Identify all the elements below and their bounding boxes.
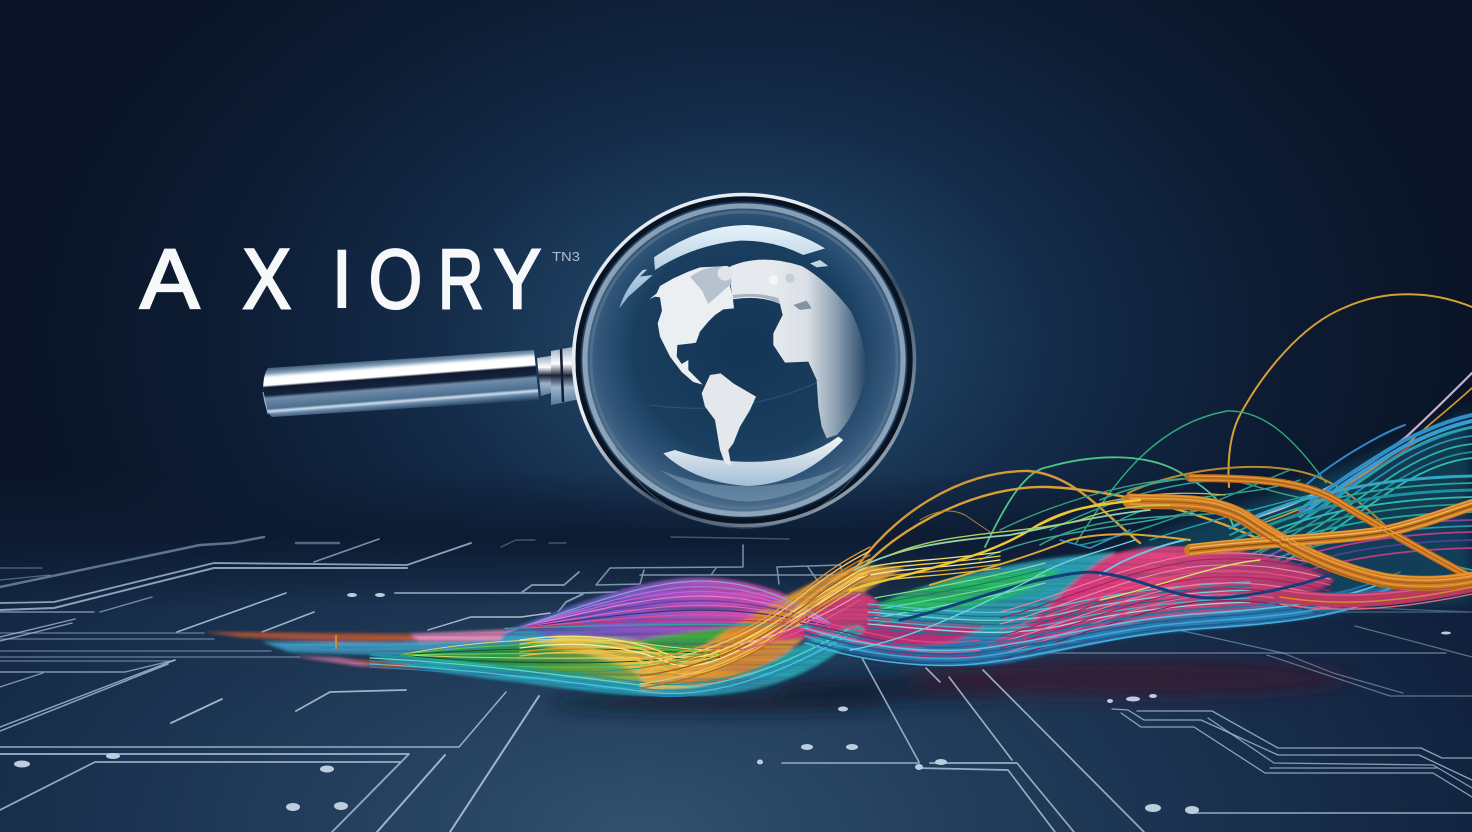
bottom lens reflection (663, 437, 843, 486)
orange yellow band strands (520, 547, 1000, 688)
logo wordmark: AXIORY: I (329, 232, 355, 326)
trademark mark: TN3 (552, 249, 580, 264)
top lens reflection (619, 225, 828, 308)
bottom blue strands (805, 572, 1400, 665)
back arcs and loose strands (850, 294, 1472, 577)
logo wordmark: AXIORY: Y (494, 231, 541, 326)
ribbon color bands (204, 546, 1400, 696)
globe continents (619, 225, 866, 502)
lower blue underside (805, 585, 1400, 665)
copper tail (262, 630, 560, 655)
hot pink within band (760, 592, 881, 640)
orange ropes on right (1130, 476, 1472, 609)
North America (649, 266, 734, 385)
teal underside left (370, 620, 865, 696)
teal mid body (860, 552, 1115, 636)
circuit traces left (0, 537, 860, 832)
magnifying glass (263, 194, 914, 528)
teal right strands (868, 582, 1250, 636)
pale outline over tail (428, 613, 550, 630)
strand bundles over bands (336, 476, 1472, 697)
circuit node dots (14, 593, 1451, 814)
logo wordmark: AXIORY: A (140, 233, 200, 326)
South America (702, 373, 756, 465)
shadow under wires (550, 660, 1350, 712)
lens body and rims (574, 194, 914, 528)
bright green right body (876, 570, 1060, 613)
Eurasia and Africa (728, 260, 866, 438)
teal under strands (370, 625, 850, 697)
purple-magenta bulge (503, 578, 830, 639)
yellow to orange band (520, 565, 905, 690)
logo wordmark: AXIORY: O (368, 233, 422, 327)
purple fan strands (505, 581, 830, 633)
green band (400, 636, 720, 682)
green fan strands (400, 639, 720, 672)
green right strands (875, 563, 1045, 624)
circuit floor (0, 537, 1472, 832)
colored fiber wire bundle (204, 294, 1472, 697)
logo wordmark: AXIORY (140, 231, 580, 327)
pink main strands (1000, 553, 1330, 660)
pink band (985, 546, 1335, 645)
upper right teal strands (1230, 415, 1472, 600)
circuit traces right (782, 605, 1472, 832)
handle (263, 346, 580, 417)
soft teal haze behind right strands (1130, 410, 1472, 612)
magenta left strands (800, 618, 980, 657)
loose highlights (850, 500, 1140, 590)
magenta left body (790, 611, 985, 647)
logo wordmark: AXIORY: X (243, 231, 291, 326)
logo wordmark: AXIORY: R (438, 232, 484, 326)
